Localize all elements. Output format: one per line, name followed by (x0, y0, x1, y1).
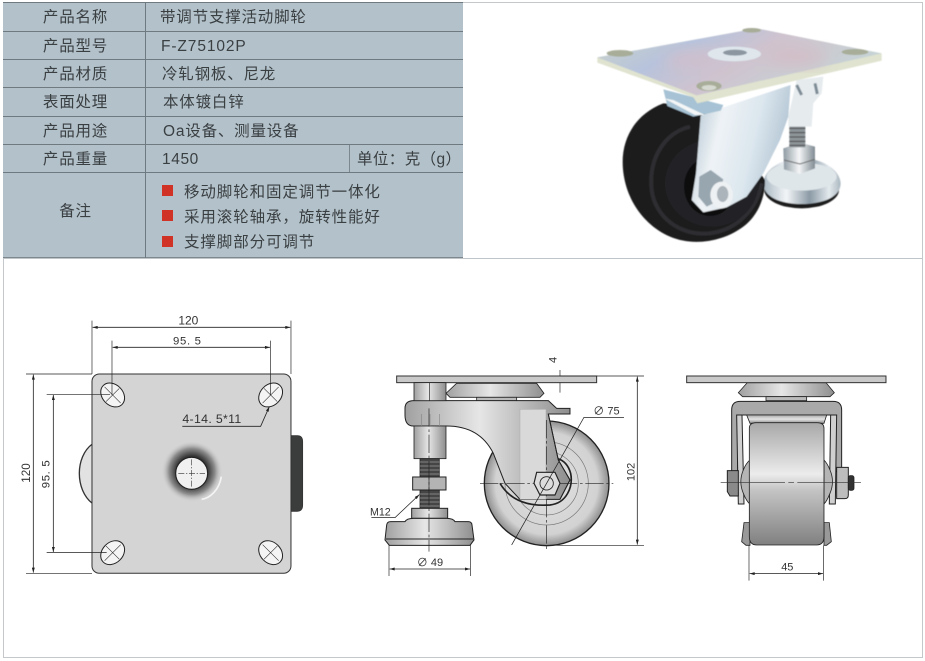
dimension 95.5 horizontal: 95. 5 (173, 336, 202, 348)
bracket (692, 85, 791, 212)
hole callout (182, 407, 269, 426)
row: product weight: 单位：克（g） (357, 151, 461, 168)
row: product material: 冷轧钢板、尼龙 (162, 66, 276, 83)
row: product use (3, 116, 463, 145)
center line (721, 482, 861, 484)
dimension 4: 4 (548, 357, 560, 363)
row: surface treatment: 表面处理 (43, 94, 108, 111)
swivel mount (738, 383, 834, 401)
row: product name: 产品名称 (43, 9, 108, 26)
axle bolt (698, 170, 733, 208)
row: product name (43, 8, 307, 26)
dimension 4 (548, 357, 597, 393)
row: product material: 产品材质 (43, 66, 108, 83)
row: product use: 产品用途 (43, 123, 108, 140)
leg bracket (405, 401, 570, 499)
panel: product specification table (3, 2, 463, 258)
dimension 102 (547, 376, 644, 545)
bullet 1: 移动脚轮和固定调节一体化 (184, 184, 381, 201)
row: remarks (3, 172, 463, 258)
mounting holes (96, 378, 287, 569)
top plate (597, 28, 882, 103)
wheel (741, 423, 832, 545)
dimension 120 vertical: 120 (20, 463, 33, 483)
row: remarks: 备注 (59, 203, 92, 220)
foot base (763, 77, 841, 208)
dimension 95.5 vertical: 95. 5 (41, 460, 53, 488)
product photo: caster with leveling foot (597, 28, 882, 242)
dimension 120 horizontal: 120 (178, 313, 199, 327)
center dimple (161, 442, 223, 503)
row: product weight: 1450 (162, 151, 199, 168)
dimension 120 vertical (20, 374, 92, 573)
row: product model (3, 31, 463, 60)
wheel edges behind plate (79, 436, 303, 511)
drawing: front view with dimension (687, 376, 886, 581)
hole callout: 4-14. 5*11 (182, 412, 242, 426)
dimension 102: 102 (625, 463, 637, 481)
dimension 95.5 vertical (41, 394, 110, 553)
fork bracket (732, 401, 842, 504)
swivel mount (446, 383, 544, 401)
dimension M12: M12 (370, 506, 391, 518)
bullet 3: 支撑脚部分可调节 (184, 234, 315, 251)
bullet 2: 采用滚轮轴承，旋转性能好 (184, 209, 381, 226)
swivel ring (663, 89, 723, 117)
row: product weight (3, 144, 463, 173)
dimension diameter 75: ∅ 75 (593, 406, 620, 418)
dimension diameter 49: ∅ 49 (417, 557, 443, 569)
mounting plate (92, 374, 291, 573)
row: product model: F-Z75102P (161, 38, 247, 55)
axle hex nut (534, 472, 560, 495)
row: product material (3, 59, 463, 88)
top plate (397, 376, 597, 383)
black wheel (623, 103, 765, 242)
bottom guard (742, 523, 831, 545)
dimension diameter 75 (512, 406, 624, 545)
row: surface treatment (3, 87, 463, 116)
wheel (484, 421, 609, 546)
center lines (429, 408, 613, 552)
drawing: side view with dimensions (370, 357, 644, 576)
top plate (687, 376, 886, 383)
adjusting screw and nuts (412, 383, 448, 518)
dimension M12 (370, 495, 419, 518)
dimension 120 horizontal (92, 313, 291, 374)
dimension 45 (749, 545, 824, 581)
dimension 45: 45 (781, 562, 793, 574)
axle nuts (727, 467, 854, 499)
drawing: top view with dimensions (20, 313, 303, 573)
dimension diameter 49 (389, 545, 471, 576)
dimension 95.5 horizontal (112, 336, 271, 395)
row: surface treatment: 本体镀白锌 (163, 94, 245, 111)
row: product use: Oa设备、测量设备 (163, 123, 299, 140)
row: product weight: 产品重量 (43, 151, 108, 168)
row: product name: 带调节支撑活动脚轮 (160, 9, 307, 26)
row: product model: 产品型号 (43, 38, 108, 55)
foot pad (385, 518, 474, 545)
